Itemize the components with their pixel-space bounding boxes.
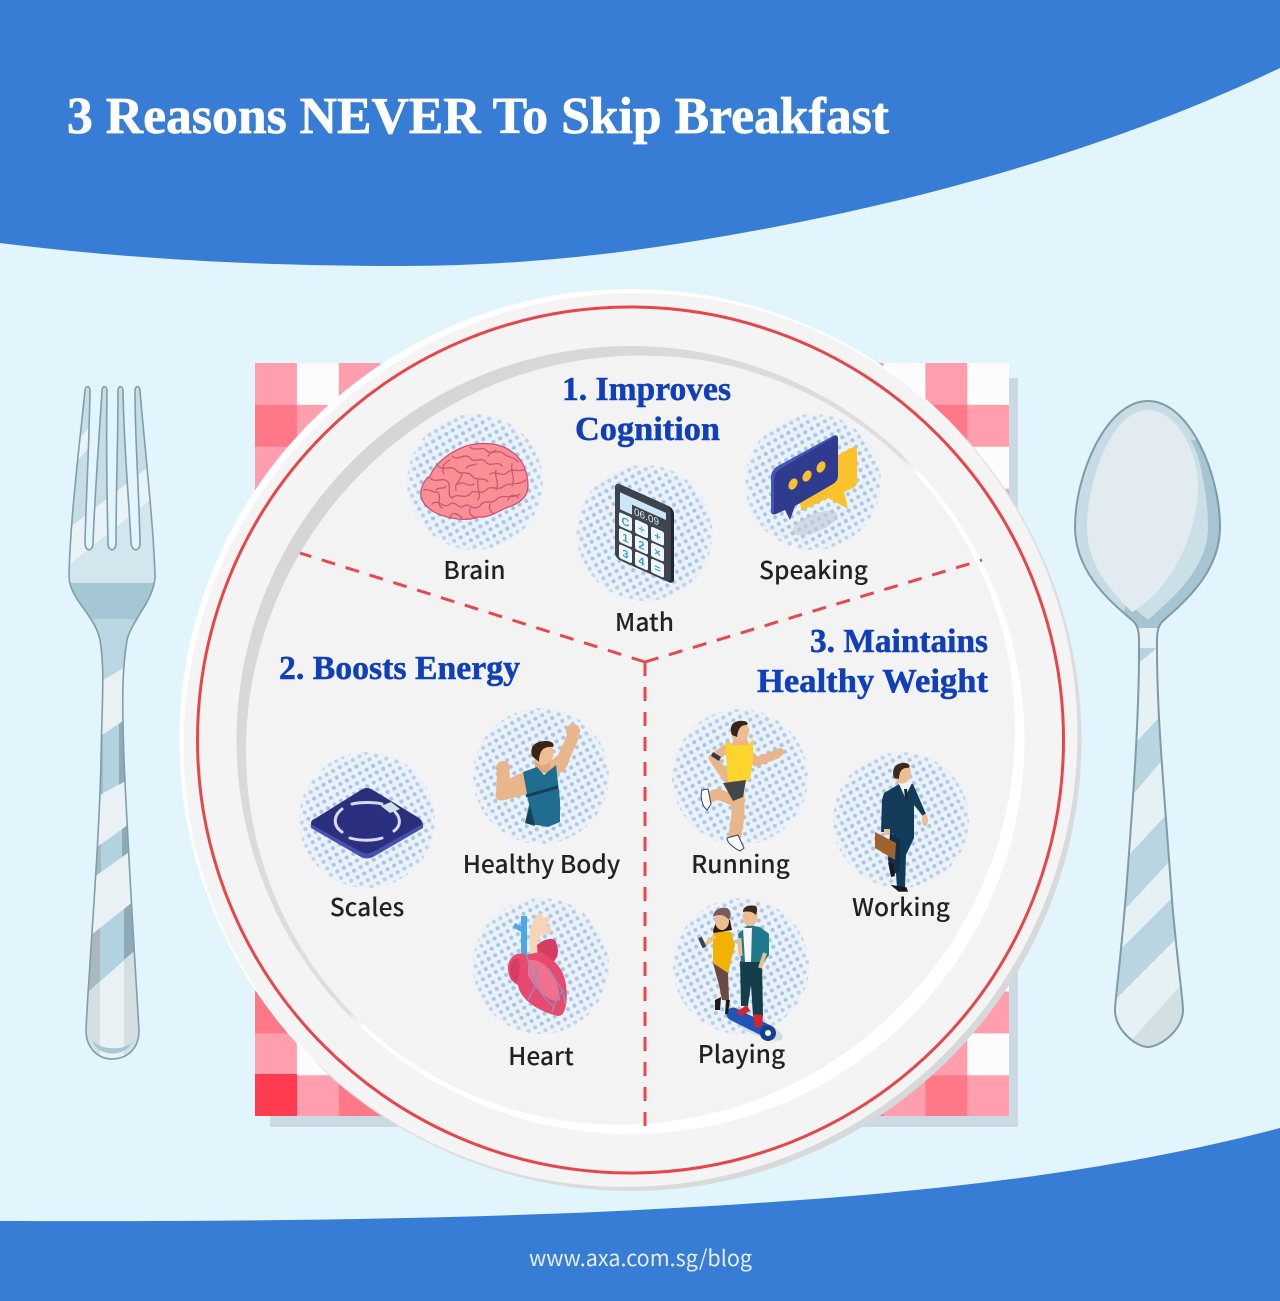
item: scales: Scales: [330, 888, 404, 924]
item: math: Math: [615, 603, 674, 639]
item: working: Working: [852, 888, 950, 924]
heading: maintains healthy weight: [757, 623, 989, 700]
item: speaking: [745, 414, 881, 587]
item: math: 1: [622, 532, 629, 546]
item: math: 4: [638, 555, 645, 569]
heading: improves cognition: 1. Improves: [562, 371, 731, 408]
section dividers: [300, 553, 982, 1128]
fork: [68, 386, 156, 1060]
item: speaking: Speaking: [759, 551, 868, 587]
item: heart: [473, 898, 609, 1073]
item: math: =: [654, 562, 661, 577]
item: math: 3: [622, 548, 629, 562]
item: scales: [299, 752, 435, 924]
bottom banner: [0, 1128, 1280, 1301]
heading: maintains healthy weight: Healthy Weight: [757, 663, 989, 700]
item: brain: Brain: [443, 551, 506, 587]
heading: improves cognition: [562, 371, 731, 448]
napkin: [255, 363, 1018, 1127]
item: working: [833, 752, 969, 924]
item: healthy body: Healthy Body: [463, 845, 621, 881]
top banner: [0, 0, 1280, 266]
heading: maintains healthy weight: 3. Maintains: [810, 623, 988, 660]
heading: improves cognition: Cognition: [575, 411, 720, 448]
item: running: [672, 709, 808, 881]
item: playing: Playing: [698, 1035, 785, 1071]
item: heart: Heart: [508, 1037, 574, 1073]
item: math: 2: [638, 539, 645, 553]
plate: [180, 289, 1082, 1191]
item: playing: [673, 898, 809, 1071]
item: brain: [407, 414, 543, 587]
item: math: +: [654, 530, 661, 545]
item: math: [576, 465, 712, 639]
item: math: ÷: [638, 523, 645, 537]
heading: boosts energy: 2. Boosts Energy: [279, 650, 520, 687]
item: healthy body: [463, 708, 621, 881]
item: math: ×: [654, 546, 661, 561]
title: 3 Reasons NEVER To Skip Breakfast: [67, 88, 890, 145]
item: running: Running: [691, 845, 790, 881]
spoon: [1070, 395, 1225, 1053]
footer url: www.axa.com.sg/blog: [529, 1241, 753, 1273]
item: math: C: [622, 515, 630, 531]
item: math: 06.09: [634, 507, 659, 529]
